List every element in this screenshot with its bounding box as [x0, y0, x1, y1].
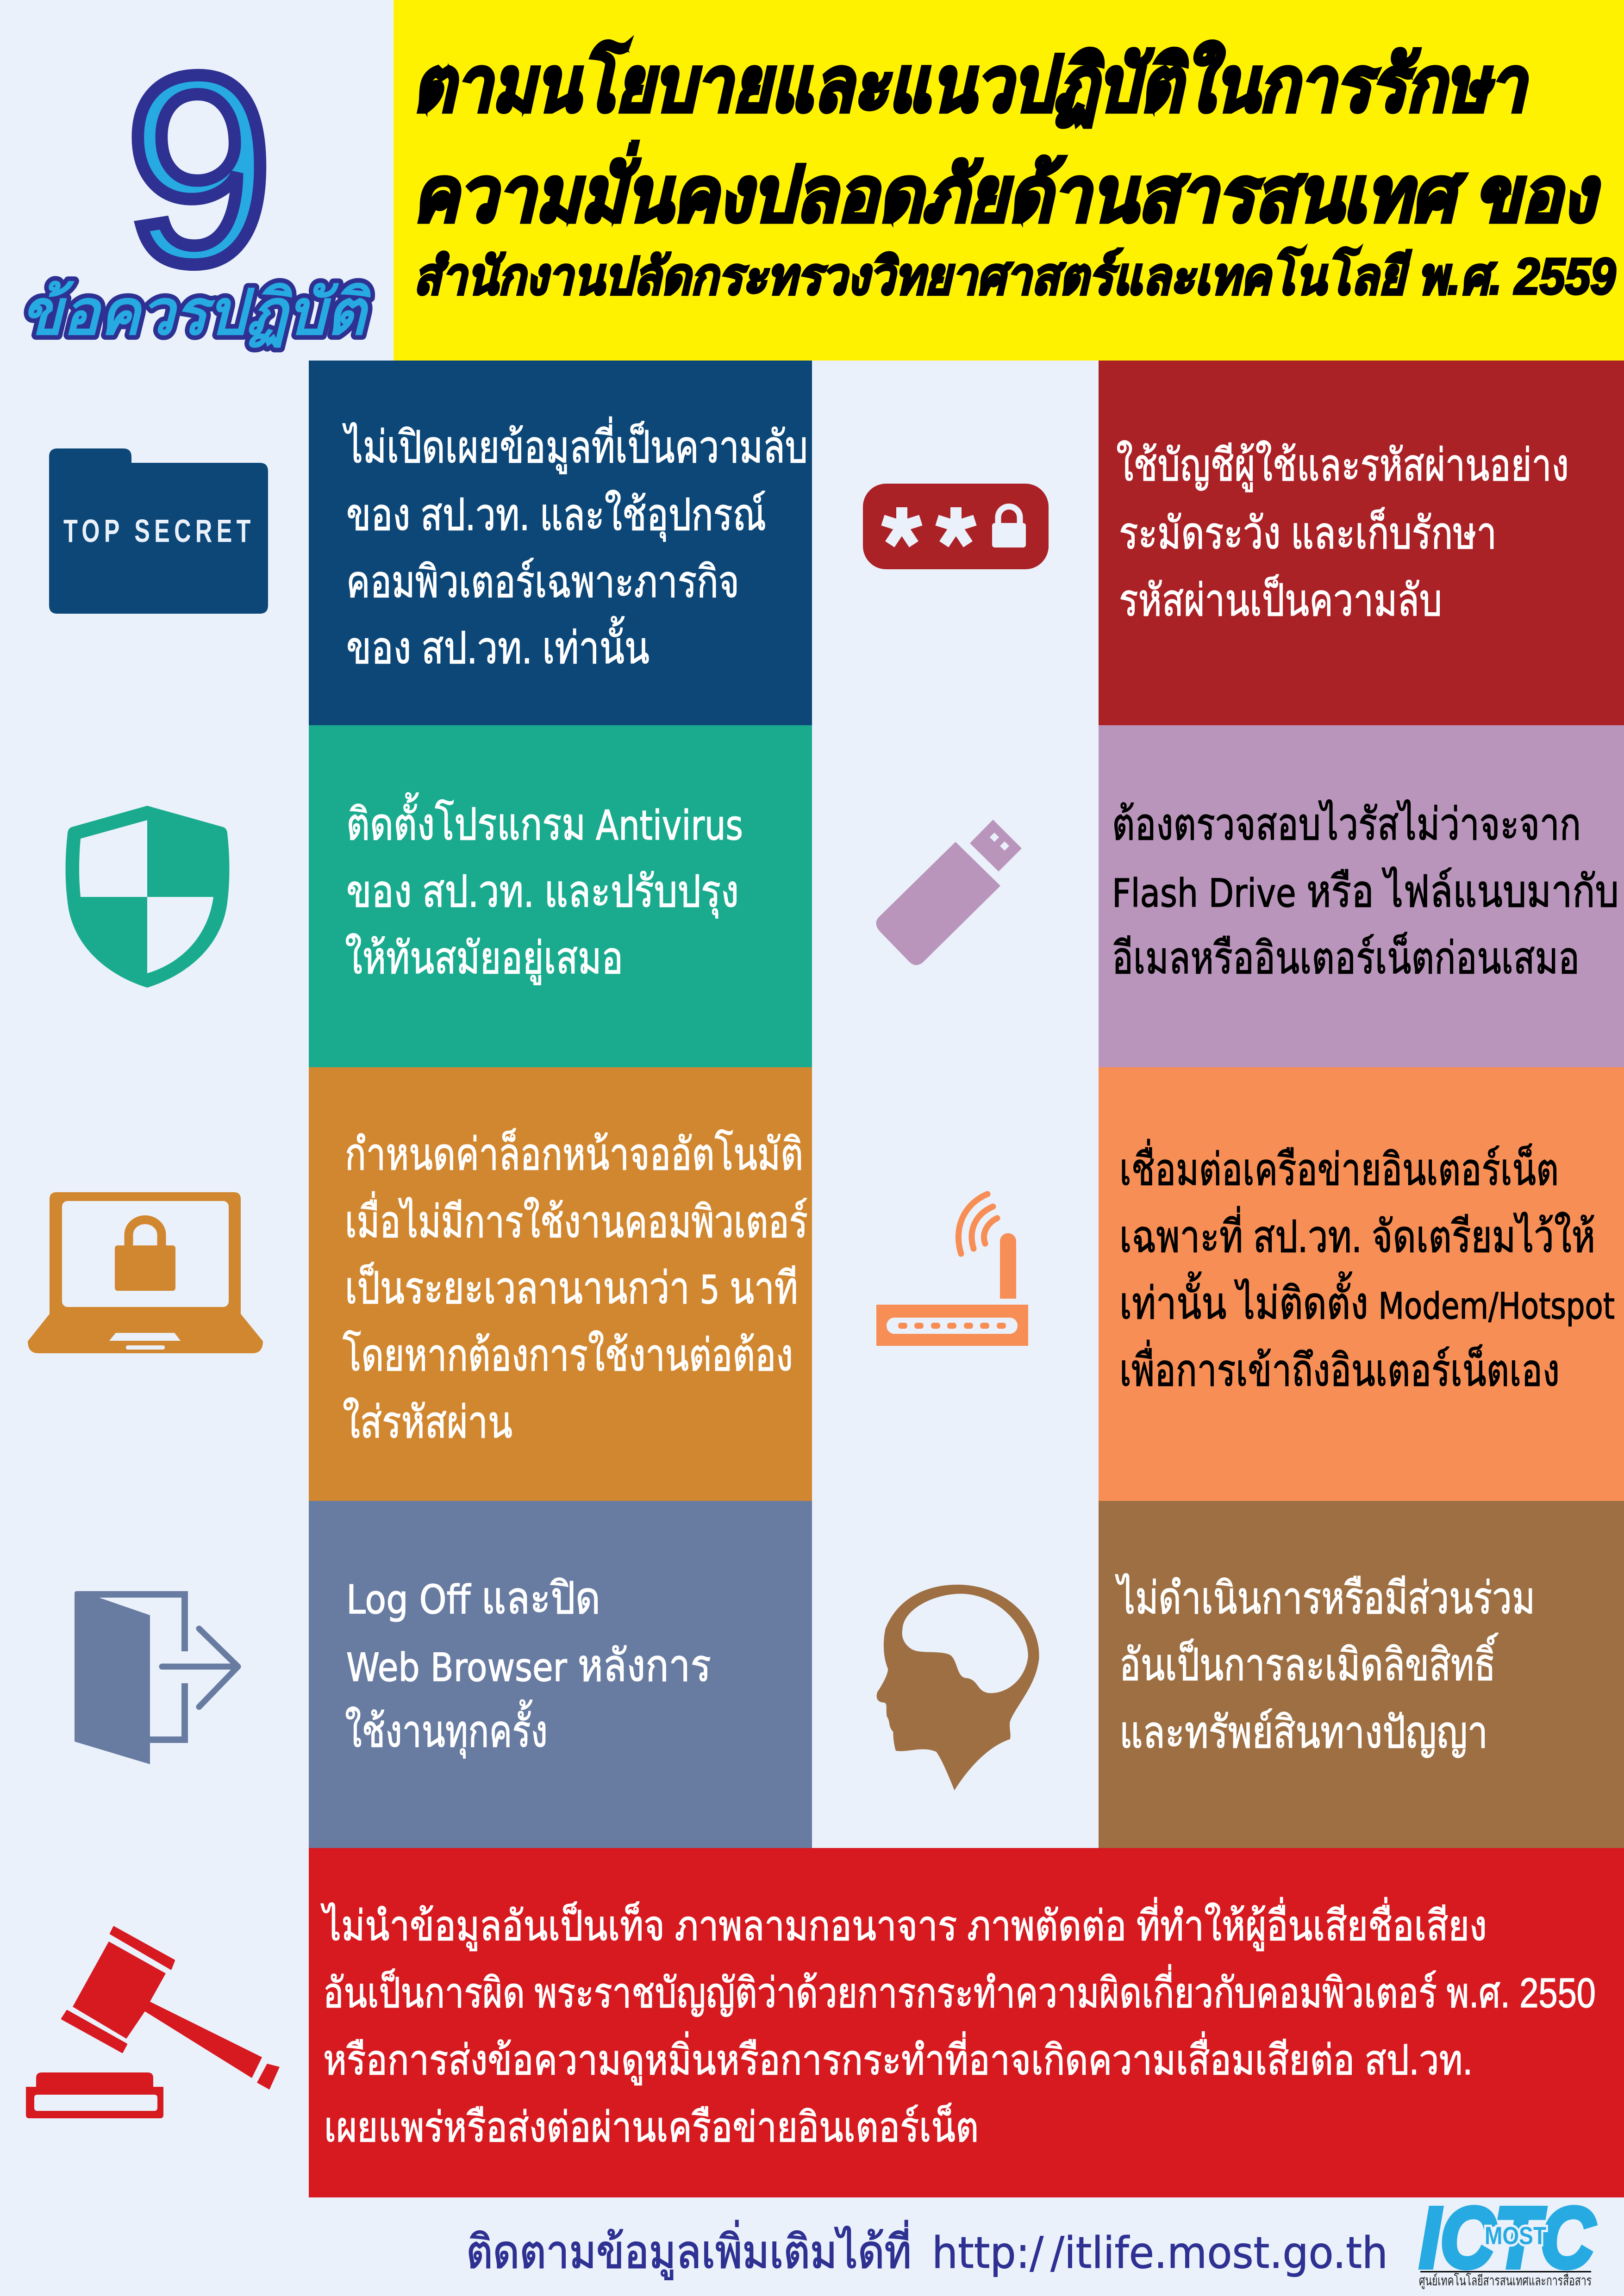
panel: log off: [309, 1501, 812, 1848]
panel: antivirus: ของ สป.วท. และปรับปรุง: [346, 867, 739, 919]
panel: virus scan: [1099, 725, 1624, 1067]
header: big number nine: 9: [125, 20, 273, 319]
panel: intellectual property: และทรัพย์สินทางปัญญา: [1119, 1708, 1488, 1758]
panel: auto screen lock: กำหนดค่าล็อกหน้าจออัตโนมัติ: [345, 1128, 803, 1179]
logo: ICTC MOST: ICTC: [1419, 2190, 1595, 2286]
panel: no false information: [309, 1848, 1624, 2197]
icon: laptop with lock: [28, 1192, 263, 1353]
icon: password field with lock: [863, 484, 1049, 569]
panel: intellectual property: [1099, 1501, 1624, 1848]
panel: do not disclose secrets: คอมพิวเตอร์เฉพาะภารกิจ: [346, 557, 739, 607]
panel: network connection: [1099, 1067, 1624, 1501]
panel: no false information: เผยแพร่หรือส่งต่อผ่านเครือข่ายอินเตอร์เน็ต: [324, 2102, 979, 2151]
panel: auto screen lock: โดยหากต้องการใช้งานต่อต้อง: [343, 1331, 793, 1380]
footer: follow more information link: [466, 2220, 1388, 2280]
panel: no false information: หรือการส่งข้อความดูหมิ่นหรือการกระทำที่อาจเกิดความเสื่อมเสียต่อ สป.วท.: [323, 2031, 1473, 2085]
icon: gavel: [26, 1927, 280, 2118]
icon: usb drive: [876, 820, 1022, 965]
footer: follow more information link: ติดตามข้อมูลเพิ่มเติมได้ที่: [466, 2220, 912, 2280]
panel: log off: Log Off และปิด: [346, 1574, 600, 1623]
panel: yellow title banner: [394, 0, 1624, 361]
footer: follow more information link: http://itlife.most.go.th: [932, 2228, 1388, 2278]
panel: do not disclose secrets: ของ สป.วท. และใช้อุปกรณ์: [346, 490, 766, 542]
panel: intellectual property: อันเป็นการละเมิดลิขสิทธิ์: [1119, 1633, 1499, 1690]
panel: log off: ใช้งานทุกครั้ง: [345, 1699, 548, 1759]
panel: do not disclose secrets: [309, 361, 812, 725]
panel: password care: รหัสผ่านเป็นความลับ: [1119, 574, 1442, 625]
icon: top secret folder: [49, 448, 268, 614]
panel: do not disclose secrets: ไม่เปิดเผยข้อมูลที่เป็นความลับ: [342, 417, 808, 474]
panel: antivirus: ติดตั้งโปรแกรม Antivirus: [346, 792, 743, 849]
icon: top secret folder: TOP SECRET: [63, 513, 255, 549]
panel: auto screen lock: เมื่อไม่มีการใช้งานคอมพิวเตอร์: [345, 1191, 808, 1247]
logo: ICTC MOST: MOST: [1485, 2222, 1546, 2250]
panel: auto screen lock: ใส่รหัสผ่าน: [343, 1398, 512, 1447]
icon: wifi router: [876, 1194, 1028, 1346]
panel: antivirus: ให้ทันสมัยอยู่เสมอ: [345, 933, 623, 985]
panel: password care: ระมัดระวัง และเก็บรักษา: [1119, 507, 1497, 558]
panel: do not disclose secrets: ของ สป.วท. เท่านั้น: [346, 616, 650, 673]
panel: log off: Web Browser หลังการ: [346, 1641, 711, 1691]
icon: door with exit arrow: [75, 1591, 238, 1764]
panel: auto screen lock: เป็นระยะเวลานานกว่า 5 นาที: [345, 1262, 798, 1313]
header: subtitle badge: ข้อควรปฏิบัติ: [21, 277, 371, 348]
icon: head with brain: [877, 1585, 1039, 1791]
panel: password care: [1099, 361, 1624, 725]
icon: shield: [66, 806, 230, 988]
panel: antivirus: [309, 725, 812, 1067]
panel: auto screen lock: [309, 1067, 812, 1501]
